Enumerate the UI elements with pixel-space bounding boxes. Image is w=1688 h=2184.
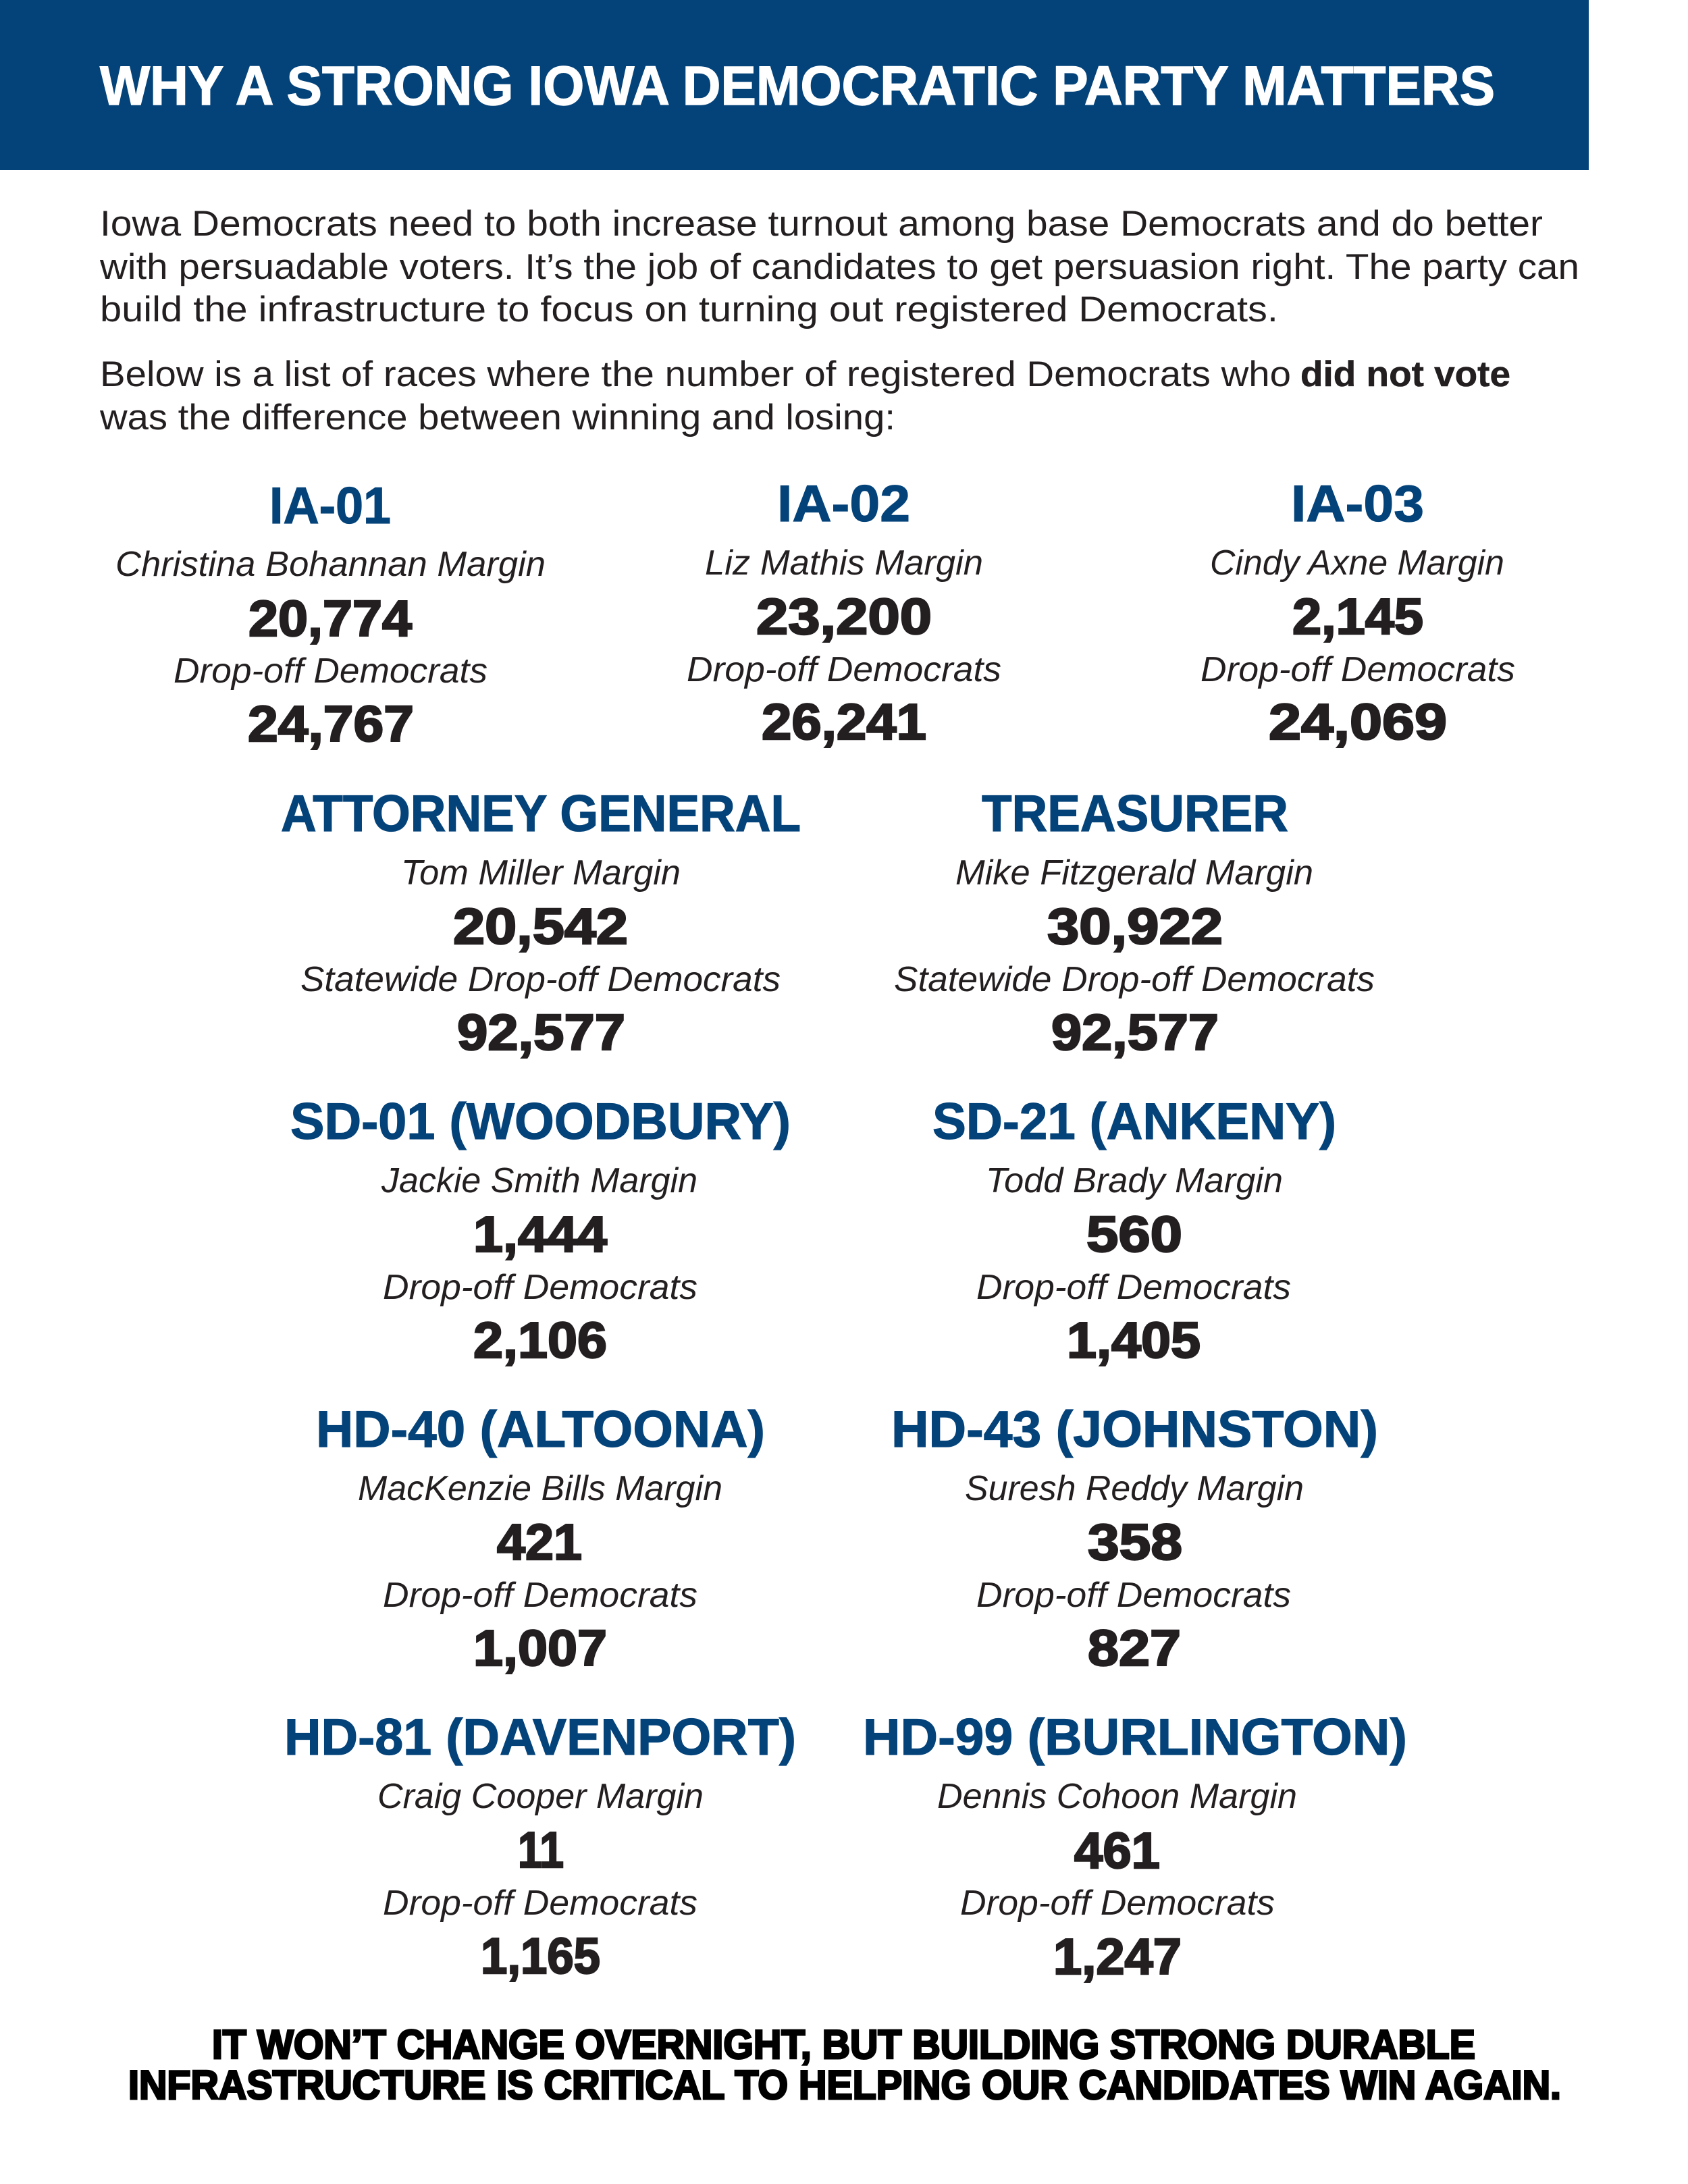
race: Attorney General: 92,577 (457, 1004, 625, 1061)
race: SD-01: 1,444 (473, 1206, 607, 1262)
race: HD-43: 358 (1088, 1514, 1182, 1570)
intro paragraph: with persuadable voters. It’s the job of candidates to get persuasion right. The party can (99, 247, 1579, 287)
race: IA-01: Christina Bohannan Margin (115, 545, 546, 584)
race: HD-81: Craig Cooper Margin (377, 1777, 704, 1816)
race: HD-43: Suresh Reddy Margin (965, 1469, 1304, 1508)
race: HD-99: 1,247 (1053, 1928, 1182, 1985)
race: IA-01: IA-01 (269, 477, 391, 535)
race: IA-01: 24,767 (248, 695, 414, 752)
race: IA-01: Drop-off Democrats (174, 651, 487, 691)
race: Attorney General (281, 785, 801, 1061)
race: SD-01: Drop-off Democrats (383, 1268, 697, 1307)
race: SD-01 (290, 1093, 791, 1368)
race: HD-43 (891, 1401, 1378, 1676)
race: HD-40: MacKenzie Bills Margin (358, 1469, 722, 1508)
race: Treasurer (894, 785, 1375, 1061)
race: IA-02: 23,200 (756, 588, 932, 645)
race: HD-99: HD-99 (BURLINGTON) (863, 1709, 1407, 1766)
race: HD-99: 461 (1074, 1822, 1160, 1879)
race: HD-81: Drop-off Democrats (383, 1884, 697, 1923)
race: Attorney General: 20,542 (453, 898, 628, 955)
intro paragraph: Iowa Democrats need to both increase turnout among base Democrats and do better (100, 204, 1543, 244)
closing statement: IT WON’T CHANGE OVERNIGHT, BUT BUILDING STRONG DURABLE (212, 2022, 1475, 2067)
race: IA-03: 2,145 (1292, 588, 1423, 645)
race: IA-03: IA-03 (1291, 475, 1424, 533)
race: HD-43: HD-43 (JOHNSTON) (891, 1401, 1378, 1458)
race: IA-02: Drop-off Democrats (687, 650, 1001, 689)
race: SD-21: Todd Brady Margin (986, 1161, 1283, 1200)
race: SD-01: Jackie Smith Margin (381, 1161, 697, 1200)
race: HD-40: HD-40 (ALTOONA) (316, 1401, 765, 1458)
race: HD-99: Dennis Cohoon Margin (937, 1777, 1297, 1816)
title: WHY A STRONG IOWA DEMOCRATIC PARTY MATTERS (100, 55, 1495, 117)
race: IA-02 (687, 475, 1001, 750)
intro paragraph: build the infrastructure to focus on turning out registered Democrats. (100, 290, 1278, 329)
race: SD-21: Drop-off Democrats (976, 1268, 1291, 1307)
race: HD-81 (284, 1709, 796, 1984)
race: Attorney General: ATTORNEY GENERAL (281, 785, 801, 843)
race: HD-40 (316, 1401, 765, 1676)
race: Attorney General: Statewide Drop-off Democrats (300, 960, 781, 999)
closing statement (128, 2022, 1561, 2108)
race: Treasurer: TREASURER (982, 785, 1288, 843)
list introduction: Below is a list of races where the number of registered Democrats who (100, 354, 1291, 394)
race: HD-43: 827 (1088, 1620, 1181, 1676)
race: SD-21: 1,405 (1067, 1312, 1201, 1368)
race: IA-02: Liz Mathis Margin (705, 543, 983, 583)
closing statement: INFRASTRUCTURE IS CRITICAL TO HELPING OUR CANDIDATES WIN AGAIN. (128, 2062, 1561, 2108)
race: SD-21: 560 (1086, 1206, 1182, 1262)
race: Treasurer: 30,922 (1047, 898, 1223, 955)
list introduction: was the difference between winning and losing: (99, 398, 895, 437)
list introduction (99, 354, 1510, 437)
race: HD-81: 1,165 (481, 1927, 600, 1984)
race: SD-21: SD-21 (ANKENY) (932, 1093, 1336, 1150)
intro paragraph (99, 204, 1579, 329)
race: IA-03: Drop-off Democrats (1201, 650, 1515, 689)
race: HD-81: 11 (518, 1821, 564, 1878)
race: Treasurer: Mike Fitzgerald Margin (955, 853, 1313, 893)
race: SD-01: SD-01 (WOODBURY) (290, 1093, 791, 1150)
race: Treasurer: Statewide Drop-off Democrats (894, 960, 1375, 999)
race: HD-43: Drop-off Democrats (976, 1576, 1291, 1615)
race: Attorney General: Tom Miller Margin (401, 853, 681, 893)
race: HD-40: 1,007 (473, 1620, 607, 1676)
race: Treasurer: 92,577 (1051, 1004, 1219, 1061)
race: SD-21 (932, 1093, 1336, 1368)
race: IA-03 (1201, 475, 1515, 750)
race: HD-40: Drop-off Democrats (383, 1576, 697, 1615)
race: HD-40: 421 (497, 1514, 582, 1570)
race: IA-01 (115, 477, 546, 752)
race: IA-02: IA-02 (777, 475, 910, 533)
race: IA-01: 20,774 (248, 590, 412, 647)
race: HD-81: HD-81 (DAVENPORT) (284, 1709, 796, 1766)
race: HD-99 (863, 1709, 1407, 1985)
race: IA-02: 26,241 (762, 693, 926, 750)
race: IA-03: 24,069 (1269, 693, 1447, 750)
race: IA-03: Cindy Axne Margin (1210, 543, 1504, 583)
list introduction: did not vote (1300, 354, 1510, 394)
header banner (0, 0, 1589, 170)
race: SD-01: 2,106 (473, 1312, 607, 1368)
race: HD-99: Drop-off Democrats (960, 1884, 1275, 1923)
